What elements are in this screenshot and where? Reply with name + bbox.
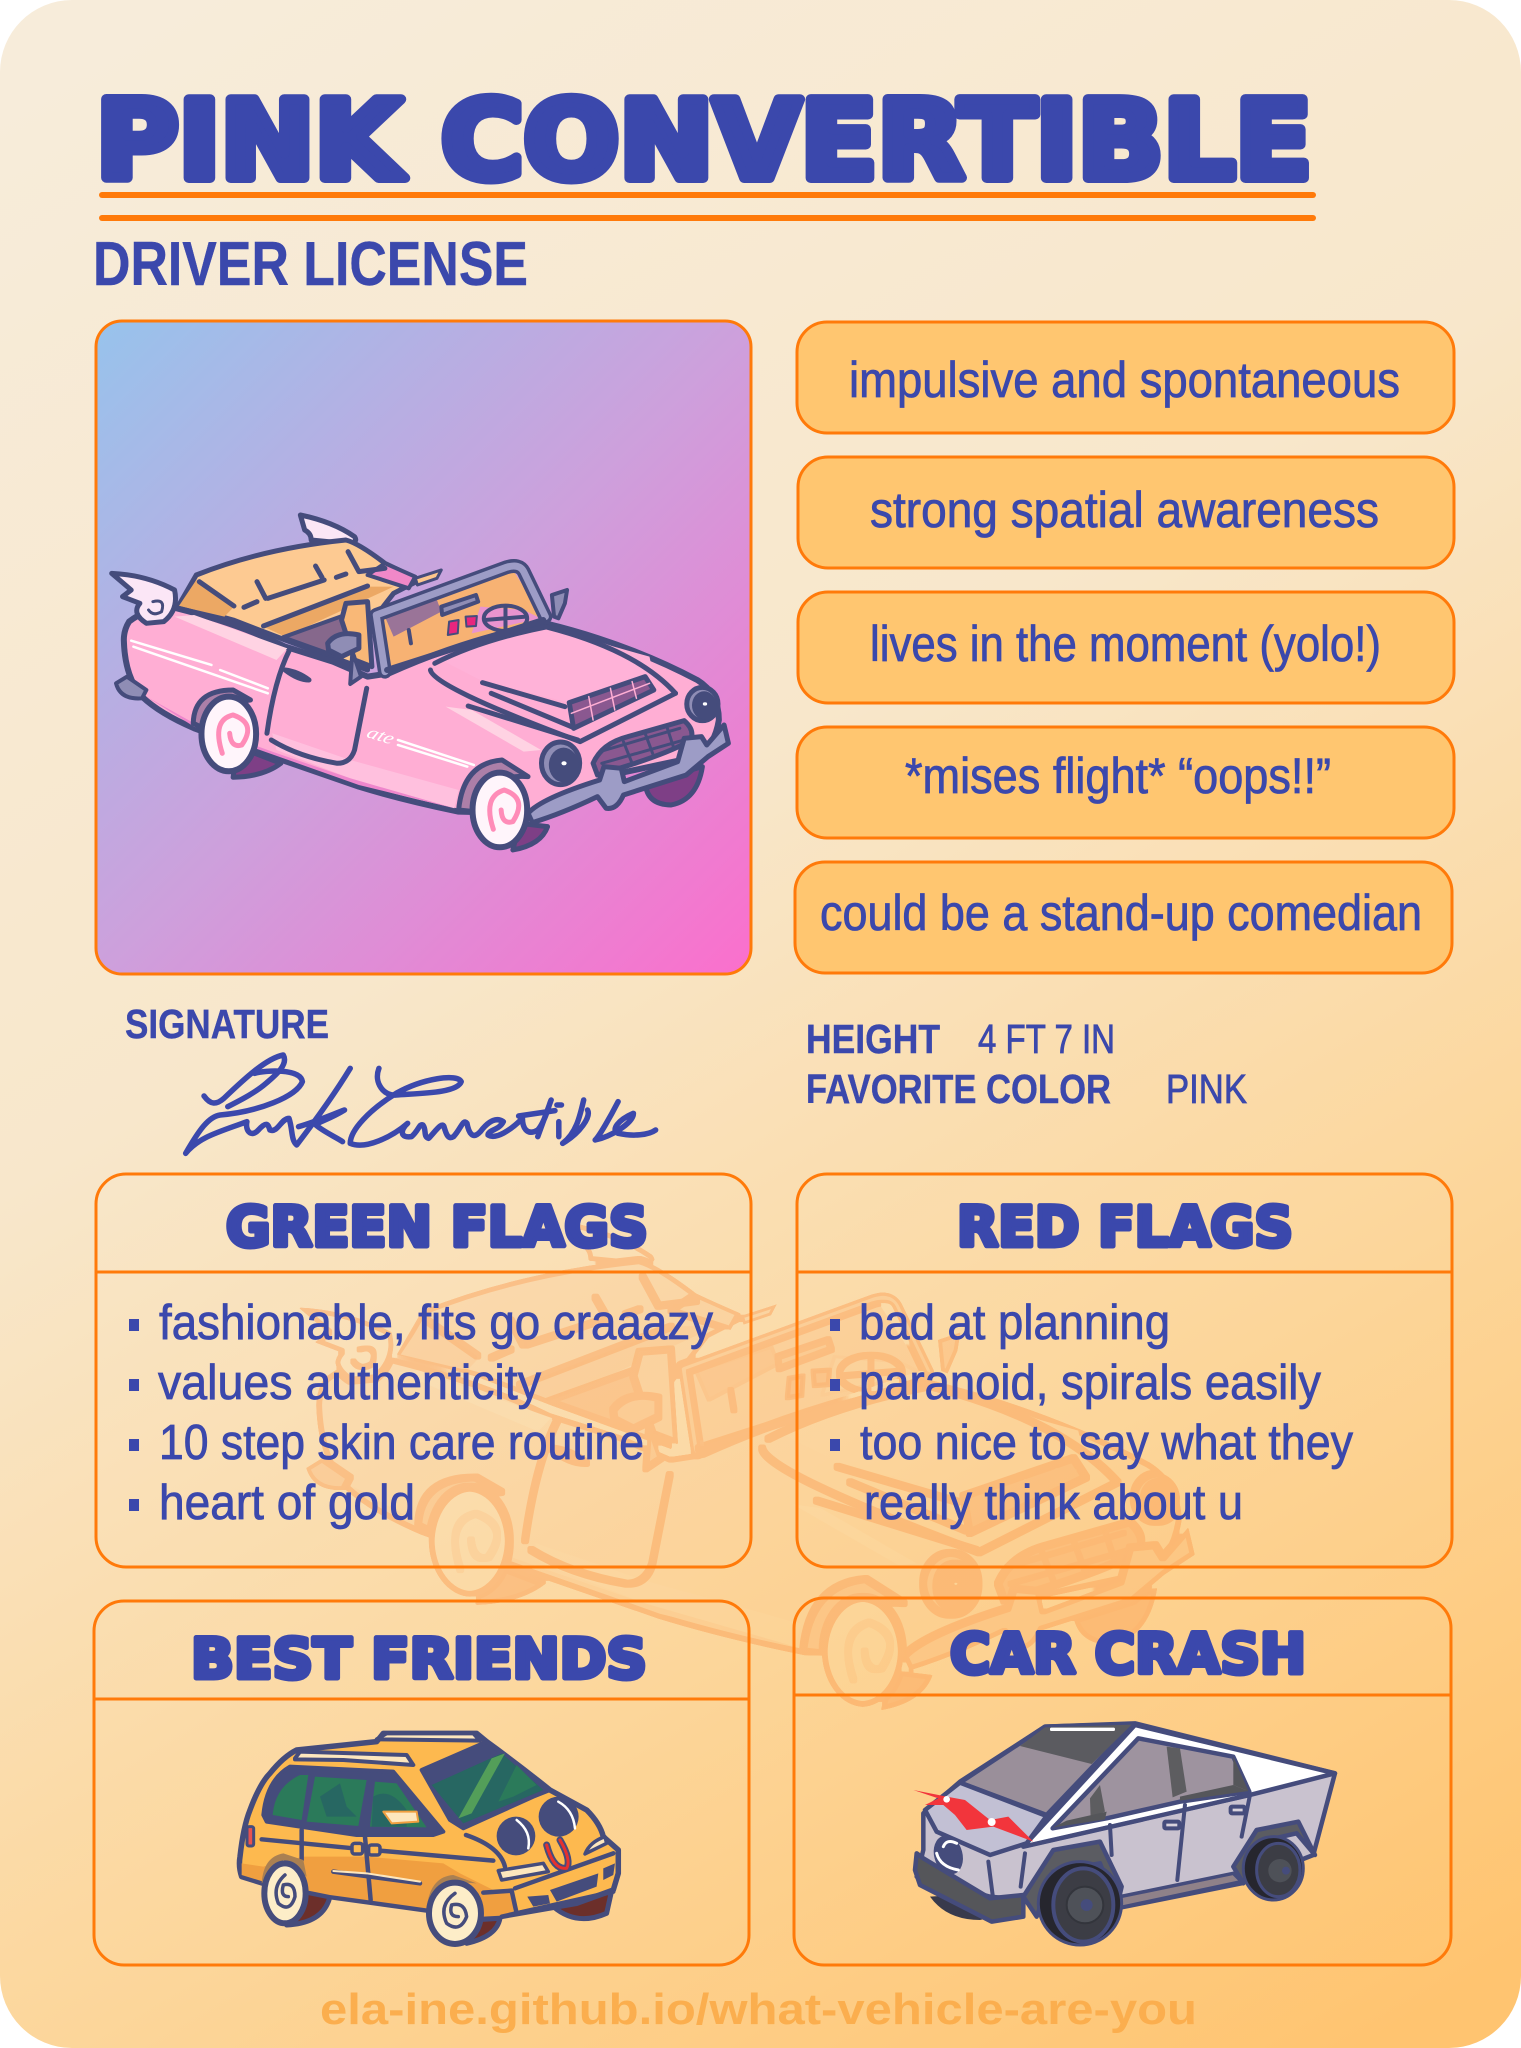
signature label: SIGNATURE xyxy=(125,1001,329,1047)
wheels xyxy=(262,1853,307,1883)
hood vent xyxy=(569,677,654,728)
heading: red flags: RED FLAGS xyxy=(957,1195,1293,1259)
door and hood lines xyxy=(267,627,675,763)
title: PINK CONVERTIBLE xyxy=(96,79,1312,204)
stats xyxy=(806,1016,1247,1112)
trim lines xyxy=(131,641,474,767)
title underlines xyxy=(99,192,1316,221)
pill: spatial: strong spatial awareness xyxy=(870,482,1379,538)
windshield frame xyxy=(376,566,545,672)
panel: red flags xyxy=(797,1174,1452,1567)
illustration: silver cybertruck xyxy=(913,1723,1335,1945)
grille xyxy=(593,721,692,775)
heading: green flags: GREEN FLAGS xyxy=(226,1195,648,1259)
rear seats xyxy=(179,540,420,670)
side window xyxy=(1053,1738,1249,1828)
pill: flight xyxy=(797,727,1454,838)
cabin xyxy=(378,567,543,668)
list: green flags xyxy=(129,1296,713,1530)
panel: green flags xyxy=(96,1174,751,1567)
side windows frame xyxy=(263,1767,443,1835)
wheel arches xyxy=(1023,1842,1122,1917)
rear wing xyxy=(112,573,176,623)
body highlights xyxy=(175,615,287,660)
roof rails xyxy=(295,1733,480,1765)
portrait panel xyxy=(96,321,751,974)
list: green flags: heart of gold xyxy=(159,1476,415,1530)
panel: best friends xyxy=(94,1601,749,1965)
list: red flags xyxy=(830,1296,1353,1530)
pill: comedian xyxy=(795,862,1452,973)
list: green flags: 10 step skin care routine xyxy=(159,1416,644,1470)
panel: car crash xyxy=(794,1598,1451,1965)
body xyxy=(239,1733,618,1918)
bumper vents xyxy=(527,1863,615,1907)
windshield frame xyxy=(422,1742,550,1828)
pill: moment xyxy=(798,592,1454,703)
door handles xyxy=(352,1843,380,1855)
front wheel xyxy=(1038,1862,1122,1945)
pill: flight: *mises flight* “oops!!” xyxy=(905,748,1331,804)
pill: comedian: could be a stand-up comedian xyxy=(820,885,1422,941)
footer url: ela-ine.github.io/what-vehicle-are-you xyxy=(320,1985,1197,2034)
subtitle: DRIVER LICENSE xyxy=(93,230,528,299)
far tire xyxy=(553,1883,613,1919)
lower shade xyxy=(242,1857,513,1917)
pill: spatial xyxy=(798,457,1454,568)
watermark car xyxy=(300,1224,1194,1709)
pill: impulsive: impulsive and spontaneous xyxy=(849,352,1400,408)
front bumper xyxy=(915,1853,1023,1922)
windshield xyxy=(960,1724,1133,1815)
mouth xyxy=(547,1840,568,1868)
height value: 4 FT 7 IN xyxy=(978,1016,1115,1062)
tail light xyxy=(247,1827,254,1846)
pill: moment: lives in the moment (yolo!) xyxy=(870,616,1381,672)
front badge xyxy=(931,1834,965,1876)
bumper xyxy=(528,725,728,823)
signature xyxy=(186,1055,656,1153)
side mirrors xyxy=(328,634,359,657)
rear wheel xyxy=(1243,1837,1303,1900)
underside shadow xyxy=(930,1893,1023,1920)
side windows glass xyxy=(273,1775,308,1820)
trait pills xyxy=(795,322,1454,973)
illustration: yellow minivan xyxy=(239,1733,618,1944)
crash mark xyxy=(913,1790,1033,1842)
top wing xyxy=(300,515,356,543)
favorite color label: FAVORITE COLOR xyxy=(806,1066,1111,1112)
door mirror xyxy=(383,1812,418,1823)
list: red flags: too nice to say what they xyxy=(860,1416,1353,1470)
favorite color value: PINK xyxy=(1166,1066,1247,1112)
heading: car crash: CAR CRASH xyxy=(950,1622,1306,1686)
rear bumper xyxy=(116,677,146,698)
roof white xyxy=(1023,1725,1335,1847)
hood xyxy=(925,1783,1047,1855)
lower body shade xyxy=(1117,1873,1242,1908)
body xyxy=(124,608,719,813)
list: red flags: paranoid, spirals easily xyxy=(859,1356,1321,1410)
trim lines xyxy=(262,1830,613,1917)
height label: HEIGHT xyxy=(806,1016,940,1062)
wheels xyxy=(193,690,250,730)
tires far side xyxy=(233,747,702,850)
list: green flags: values authenticity xyxy=(158,1356,541,1410)
windshield glass xyxy=(432,1753,543,1823)
body xyxy=(917,1723,1335,1908)
list: green flags: fashionable, fits go craaazy xyxy=(159,1296,713,1350)
door lines xyxy=(988,1795,1250,1895)
headlights xyxy=(541,742,580,785)
list: red flags: really think about u xyxy=(864,1476,1243,1530)
front lights xyxy=(498,1863,548,1880)
eyes xyxy=(497,1817,535,1855)
list: red flags: bad at planning xyxy=(859,1296,1170,1350)
door badge: ate xyxy=(363,723,398,749)
heading: best friends: BEST FRIENDS xyxy=(191,1627,647,1691)
pill: impulsive xyxy=(797,322,1454,433)
illustration: pink convertible xyxy=(112,515,728,850)
